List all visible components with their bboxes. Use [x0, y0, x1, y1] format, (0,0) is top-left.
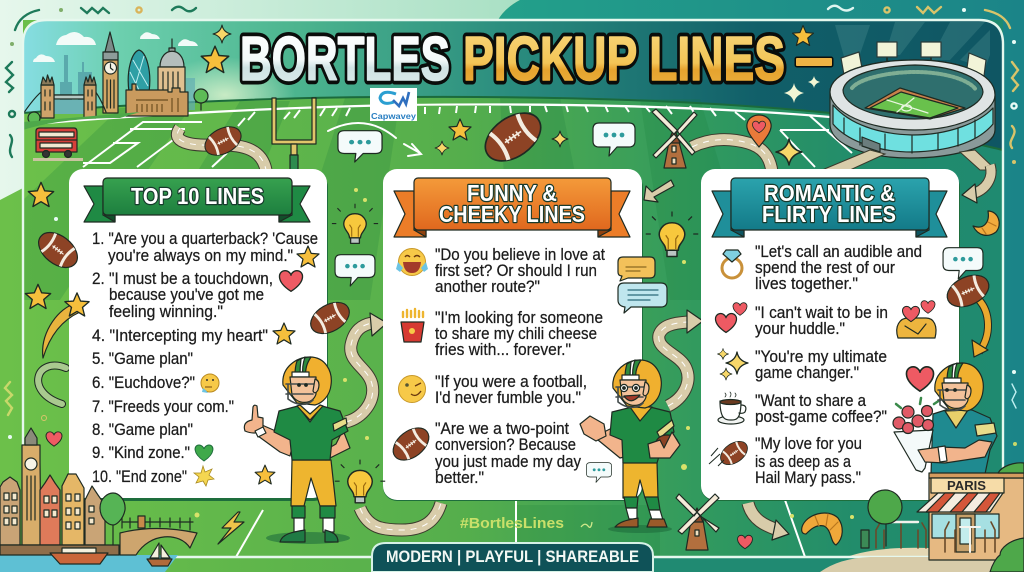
icon: heart: [906, 367, 934, 391]
icon: hearts: [715, 303, 747, 332]
road: bus route: [177, 128, 266, 170]
left field decor: [9, 182, 66, 446]
icon: ring: [722, 250, 742, 278]
list: 4. "Intercepting my heart": [92, 327, 268, 345]
player three: flowers: [893, 363, 997, 474]
clouds: [33, 32, 198, 62]
list: 9. "Kind zone.": [92, 444, 190, 462]
icon: sparkles: [718, 348, 748, 380]
list: 7. "Freeds your com.": [92, 398, 234, 416]
trees: [28, 89, 208, 124]
icon: football by road: [204, 126, 242, 156]
Tower Bridge: [23, 75, 106, 118]
lines: "If you were a football,: [435, 373, 587, 391]
lines: [755, 243, 922, 487]
card body: [69, 173, 328, 501]
sky band: [23, 20, 1003, 160]
tagline pill: MODERN | PLAYFUL | SHAREABLE: [386, 548, 639, 566]
pitch: [865, 88, 965, 119]
list: 6. "Euchdove?": [92, 374, 195, 392]
banner: [712, 178, 947, 237]
icon: small bubble: [586, 463, 612, 482]
lines: game changer.": [755, 364, 859, 382]
lines: "Are we a two-point: [435, 420, 569, 438]
icon: lightbulb top: [332, 204, 378, 243]
icon: flying football: [709, 437, 752, 469]
list: 8. "Game plan": [92, 421, 193, 439]
player one: thumbs up: [244, 357, 350, 544]
lines: "Want to share a: [755, 392, 867, 410]
lines: is as deep as a: [755, 453, 852, 471]
icons overlapping card three: [942, 248, 994, 313]
light beams: [835, 22, 990, 68]
dots: [194, 188, 854, 519]
icon: speech bubble top left: [338, 131, 382, 162]
icon: windmill bottom: [676, 494, 719, 550]
road: windmill to pin: [692, 140, 772, 172]
title: BORTLES: [240, 25, 450, 94]
list: 1. "Are you a quarterback? 'Cause: [92, 230, 318, 248]
icon: croissant top: [973, 211, 999, 235]
squiggle: [581, 522, 592, 527]
list: 5. "Game plan": [92, 350, 193, 368]
gate: [862, 137, 880, 152]
icon: sparkle: [552, 131, 568, 147]
river: [0, 555, 178, 572]
icon: double decker bus: [33, 128, 83, 161]
road: arrow to romantic card: [659, 310, 703, 406]
card: Top 10 Lines: [69, 169, 328, 501]
glass band: [833, 105, 993, 152]
lines: "You're my ultimate: [755, 348, 887, 366]
lines: [435, 246, 605, 487]
icon: football: [387, 421, 435, 467]
Gherkin: [128, 50, 150, 92]
card body: [383, 173, 643, 501]
lines: better.": [435, 469, 484, 487]
icon: hugging hearts: [897, 301, 936, 338]
list: [92, 230, 318, 486]
lines: to share my chili cheese: [435, 325, 597, 343]
Paris cafe: PARIS: [947, 478, 986, 493]
icons overlapping card one: [32, 225, 355, 358]
icon: windmill: [652, 109, 697, 168]
title: PICKUP LINES: [463, 25, 785, 94]
icon: Capwavey logo: Capwavey: [371, 111, 416, 121]
trees right: [868, 490, 902, 546]
title: PICKUP LINES: [463, 25, 785, 94]
rim: [830, 60, 995, 130]
cafe seating: [820, 522, 930, 572]
road: arrow right of stadium: [962, 165, 991, 203]
icon: lightbulb between cards two and three: [646, 212, 698, 256]
lines: lives together.": [755, 275, 858, 293]
icon: lightbulb bottom: [335, 460, 385, 503]
Amsterdam houses and Big Ben: [0, 428, 125, 555]
Parliament building: [126, 84, 188, 116]
lines: "Let's call an audible and: [755, 243, 922, 261]
sky glow: [186, 60, 290, 101]
banner: [84, 178, 310, 222]
lines: conversion? Because: [435, 436, 576, 454]
icon: goal post: [272, 98, 316, 170]
card: Romantic and Flirty Lines: [701, 169, 960, 501]
icon: laughing face: [396, 248, 428, 276]
title dash: [796, 58, 832, 66]
lines: your huddle.": [755, 320, 845, 338]
field: [24, 96, 1002, 160]
banner: FUNNY &: [467, 180, 557, 206]
lines: you just made my day: [435, 453, 582, 471]
icon: comet: [43, 293, 89, 358]
banner: ROMANTIC &: [764, 180, 895, 206]
banner: [394, 178, 630, 237]
list: because you've got me: [109, 286, 264, 304]
road: arrow to funny card: [346, 313, 387, 422]
lines: Hail Mary pass.": [755, 469, 861, 487]
list: feeling winning.": [109, 303, 223, 321]
stadium: [830, 22, 995, 158]
banner: CHEEKY LINES: [439, 201, 585, 227]
lines: another route?": [435, 278, 540, 296]
lines: "I can't wait to be in: [755, 304, 888, 322]
floodlights: [840, 41, 987, 76]
roads from stadium: [822, 150, 996, 170]
London skyline: [23, 32, 208, 130]
boats: [50, 543, 172, 566]
lines: post-game coffee?": [755, 408, 887, 426]
icon: small heart: [737, 535, 753, 549]
arrow: gold curved: [972, 300, 988, 357]
card body: [701, 173, 960, 501]
icon: croissant bottom: [802, 513, 842, 545]
base wall: [830, 60, 995, 158]
seating bowl: [843, 65, 983, 119]
icon: map pin heart: [747, 115, 771, 147]
arrow: small tan arrow: [644, 180, 674, 202]
list: 2. "I must be a touchdown,: [92, 270, 273, 288]
lines: "I'm looking for someone: [435, 309, 603, 327]
lines: first set? Or should I run: [435, 262, 597, 280]
lines: I'd never fumble you.": [435, 389, 581, 407]
banner: FLIRTY LINES: [762, 201, 896, 227]
icon: lightning: [218, 512, 244, 544]
tagline pill: [372, 543, 653, 572]
road: bulb to card two: [360, 503, 441, 530]
road: card three bottom arrow: [748, 503, 789, 540]
hashtag: #BortlesLines: [460, 515, 564, 532]
icon: fries: [401, 309, 424, 342]
icon: speech bubble left of card two: [335, 255, 375, 286]
icon: coffee cup: [718, 392, 746, 424]
icon: star and sparkle: [435, 119, 471, 155]
Big Ben: [103, 32, 118, 113]
list: 10. "End zone": [92, 468, 187, 486]
icon: gold sparkle: [776, 139, 802, 165]
lines: "Do you believe in love at: [435, 246, 605, 264]
St Paul's dome: [158, 39, 185, 95]
icon: Capwavey logo: [370, 88, 417, 121]
icon: large football: [484, 112, 542, 162]
icon: winking face: [398, 376, 426, 402]
arrow: white sweep: [328, 123, 421, 156]
banner: TOP 10 LINES: [131, 183, 264, 209]
icon: green swirl: [38, 366, 66, 404]
list icons: [194, 246, 319, 486]
lines: fries with... forever.": [435, 341, 571, 359]
canal bridge: [120, 516, 197, 555]
title: BORTLES: [240, 25, 450, 94]
title sparkles: [201, 25, 820, 103]
Paris cafe: [917, 463, 1024, 572]
icon: yellow and blue bubbles: [618, 257, 667, 313]
card: Funny and Cheeky Lines: [383, 169, 667, 501]
icon: speech bubble top centre: [593, 123, 635, 156]
shore band bottom right: [820, 557, 1024, 572]
title: [240, 32, 786, 85]
mowing stripes: [23, 97, 760, 557]
player two: excited with ball: [580, 360, 680, 533]
lines: "My love for you: [755, 435, 862, 453]
border decorations: [5, 6, 1018, 446]
list: you're always on my mind.": [108, 247, 293, 265]
lines: spend the rest of our: [755, 259, 895, 277]
yard lines: [23, 104, 852, 557]
